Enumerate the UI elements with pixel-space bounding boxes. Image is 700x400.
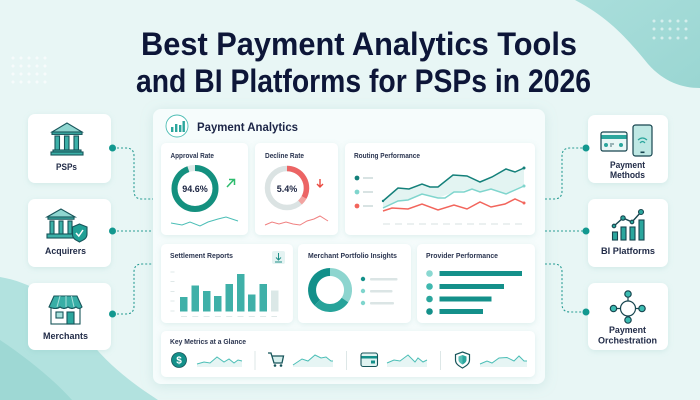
- decorative wave: top right: [575, 0, 700, 88]
- legend: [355, 176, 373, 208]
- card: Key Metrics at a Glance: Key Metrics at a Glance: [170, 337, 246, 346]
- icon: bank with shield: [47, 209, 87, 242]
- donut: approval 94.6%: [174, 168, 216, 209]
- horizontal bars: [426, 270, 522, 315]
- icon: up arrow: [227, 180, 234, 187]
- card: Merchant Portfolio Insights: Merchant Portfolio Insights: [308, 251, 397, 260]
- sparkline: [265, 216, 328, 225]
- title: Best Payment Analytics Tools: [141, 26, 577, 62]
- heading: Payment Analytics: Payment Analytics: [197, 120, 298, 134]
- card: Approval Rate: [161, 143, 248, 235]
- card: Decline Rate: Decline Rate: [265, 151, 304, 160]
- icon: bars with trend: [612, 210, 644, 240]
- card: Merchant Portfolio Insights: [298, 244, 411, 323]
- icon: storefront: [49, 296, 82, 324]
- label: Acquirers: Acquirers: [45, 246, 86, 257]
- card: Approval Rate: Approval Rate: [170, 151, 214, 160]
- icon: hub network: [610, 291, 645, 323]
- metric: shield: [456, 352, 527, 368]
- label: BI Platforms: BI Platforms: [601, 246, 655, 257]
- donut: decline 5.4%: [268, 168, 306, 208]
- card: Settlement Reports: [161, 244, 293, 323]
- card: Routing Performance: Routing Performance: [354, 151, 420, 160]
- icon: analytics badge: [166, 115, 188, 137]
- decorative wave: bottom left: [0, 277, 158, 400]
- icon: download: [272, 251, 285, 264]
- title: and BI Platforms for PSPs in 2026: [136, 63, 591, 99]
- label: Payment Methods: [610, 160, 646, 181]
- card: Settlement Reports: Settlement Reports: [170, 251, 233, 260]
- card: Key Metrics at a Glance: [161, 331, 535, 377]
- decorative dots: right: [652, 20, 688, 40]
- label: Merchants: Merchants: [43, 331, 88, 342]
- icon: card and phone: [601, 125, 652, 156]
- legend: [361, 277, 398, 305]
- title: [136, 26, 591, 99]
- card: Provider Performance: Provider Performance: [426, 251, 498, 260]
- connector dots: [109, 144, 590, 318]
- panel: Acquirers: [28, 199, 111, 267]
- icon: down arrow: [317, 179, 323, 187]
- connectors: [113, 148, 586, 314]
- panel: Payment Orchestration: [588, 283, 668, 350]
- label: PSPs: PSPs: [56, 162, 77, 173]
- metric: dollar: [172, 352, 242, 368]
- label: Payment Methods: Payment: [610, 160, 646, 171]
- panel: PSPs: [28, 114, 111, 183]
- card: Routing Performance: [345, 143, 535, 235]
- metric: cart: [268, 353, 333, 367]
- sparkline: [171, 217, 238, 226]
- label: Payment Orchestration: Orchestration: [598, 336, 657, 346]
- label: Payment Methods: Methods: [610, 170, 645, 181]
- panel: BI Platforms: [588, 199, 668, 267]
- label: Payment Orchestration: [598, 325, 657, 346]
- icon: bank: [51, 123, 83, 155]
- card: Provider Performance: [417, 244, 535, 323]
- panel: Merchants: [28, 283, 111, 350]
- bar chart: [170, 272, 278, 316]
- decorative dots: left: [12, 56, 46, 84]
- panel: Payment Methods: [588, 115, 668, 183]
- donut chart: [312, 272, 348, 308]
- metric: card: [361, 353, 427, 367]
- card: Approval Rate: 94.6%: [182, 184, 208, 194]
- line chart: [382, 166, 526, 224]
- label: Payment Orchestration: Payment: [609, 325, 647, 336]
- metric: dollar: $: [176, 356, 182, 366]
- panel: Payment Analytics dashboard: [153, 109, 545, 384]
- card: Decline Rate: [255, 143, 338, 235]
- card: Decline Rate: 5.4%: [277, 184, 297, 194]
